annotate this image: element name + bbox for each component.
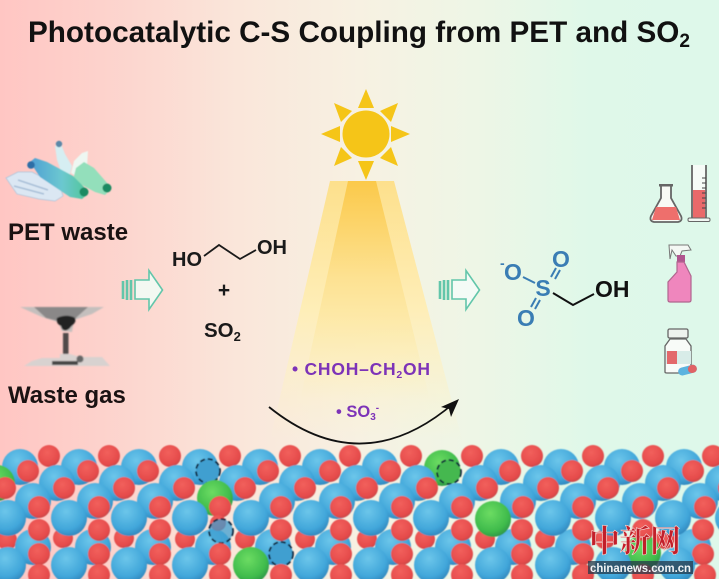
- second oxygen row: [17, 460, 704, 482]
- product: hydroxymethanesulfonate structure: [500, 246, 630, 331]
- radical: SO3: -: [376, 403, 379, 414]
- ethylene glycol structure: [172, 237, 287, 271]
- top oxygen row: [38, 445, 719, 467]
- front metal row lower: [0, 547, 695, 579]
- icon: sun: [321, 89, 410, 180]
- plus sign: +: [218, 279, 230, 302]
- icon: flask: [650, 184, 682, 222]
- icon: graduated cylinder: [688, 165, 710, 222]
- product: hydroxymethanesulfonate structure: -: [500, 255, 505, 271]
- ethylene glycol structure: OH: [257, 237, 287, 259]
- bottom oxygen row: [28, 564, 716, 579]
- icon: PET bottles: [6, 141, 112, 201]
- icon: spray bottle: [668, 245, 691, 302]
- icon: waste gas chimney: [20, 307, 110, 366]
- SO2 label: SO: [204, 319, 234, 342]
- watermark: chinanews.com.cn: [590, 561, 691, 575]
- fifth oxygen row: [28, 519, 714, 541]
- oxygen vacancy: on green atom: [437, 460, 461, 484]
- product: hydroxymethanesulfonate structure: OH: [595, 276, 630, 302]
- oxygen vacancy: centre: [209, 519, 233, 543]
- title: 2: [679, 31, 690, 52]
- sixth oxygen row: [28, 543, 714, 565]
- catalyst surface lattice: [0, 445, 719, 579]
- product: hydroxymethanesulfonate structure: O: [552, 246, 570, 272]
- title: Photocatalytic C-S Coupling from PET and SO: [28, 16, 675, 49]
- radical: SO3: 3: [370, 412, 376, 423]
- third metal row: [0, 465, 719, 501]
- arrow: reaction to product: [440, 270, 480, 310]
- product: hydroxymethanesulfonate structure: O: [517, 305, 535, 331]
- radical: CHOH-CH2OH: 2: [396, 369, 402, 381]
- third oxygen row: [0, 477, 719, 499]
- radical: CHOH-CH2OH: • CHOH–CH: [292, 359, 396, 379]
- arrow: feedstock to reaction: [123, 270, 162, 310]
- fourth oxygen row: [28, 496, 716, 531]
- SO2 label: 2: [234, 329, 241, 344]
- light beam: [270, 181, 462, 440]
- product: hydroxymethanesulfonate structure: O: [504, 259, 522, 285]
- oxygen vacancy: upper left: [196, 459, 220, 483]
- back metal row: [2, 449, 702, 486]
- icon: medicine bottle and pills: [665, 329, 698, 376]
- oxygen vacancy: lower: [269, 542, 293, 566]
- watermark: [588, 516, 693, 575]
- rear oxygen row: [0, 528, 675, 550]
- label: Waste gas: Waste gas: [8, 382, 126, 409]
- fourth metal row: [15, 480, 718, 519]
- ethylene glycol structure: HO: [172, 249, 202, 271]
- front metal row upper: [0, 500, 719, 537]
- watermark: 中新网: [589, 516, 681, 561]
- fifth metal row: [15, 529, 711, 571]
- radical: SO3: • SO: [336, 403, 370, 421]
- curved reaction arrow: [269, 399, 459, 444]
- label: PET waste: PET waste: [8, 219, 128, 246]
- radical: CHOH-CH2OH: OH: [403, 359, 430, 379]
- product: hydroxymethanesulfonate structure: S: [535, 275, 551, 301]
